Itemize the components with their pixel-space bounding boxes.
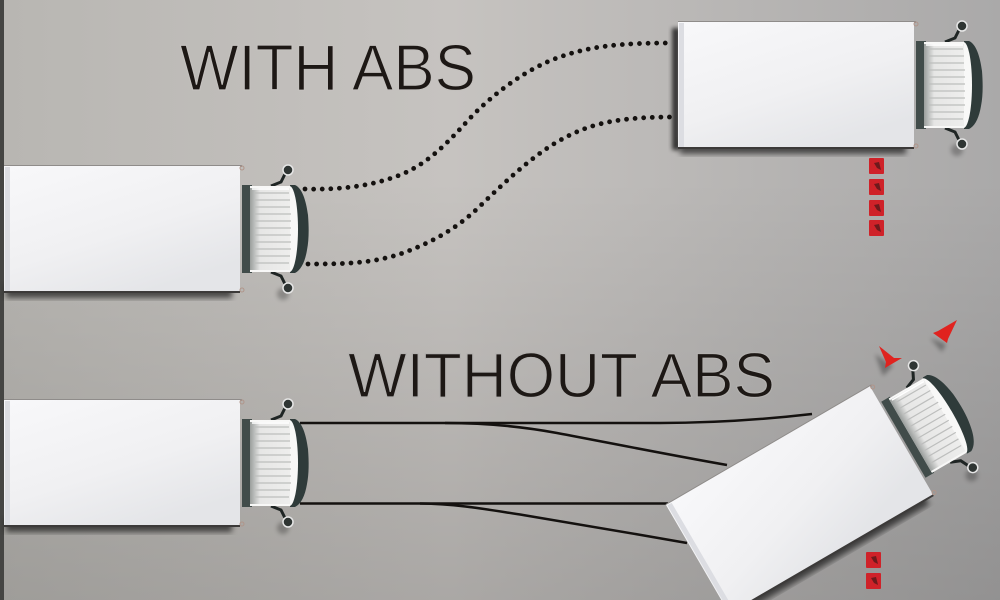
red markers: with ABS <box>869 158 884 236</box>
left edge strip <box>0 0 4 600</box>
truck: with ABS end <box>672 21 983 156</box>
knocked-over cone left <box>875 346 902 376</box>
truck: with ABS start <box>4 165 309 300</box>
truck: without ABS start <box>4 399 309 534</box>
knocked-over cone right <box>930 320 957 352</box>
title: with ABS: WITH ABS <box>180 31 476 104</box>
skid marks without ABS <box>300 414 812 543</box>
red markers: without ABS <box>866 552 881 589</box>
truck: without ABS skidded <box>665 351 997 600</box>
dotted tracks with ABS <box>305 43 673 264</box>
title: without ABS: WITHOUT ABS <box>348 341 775 411</box>
